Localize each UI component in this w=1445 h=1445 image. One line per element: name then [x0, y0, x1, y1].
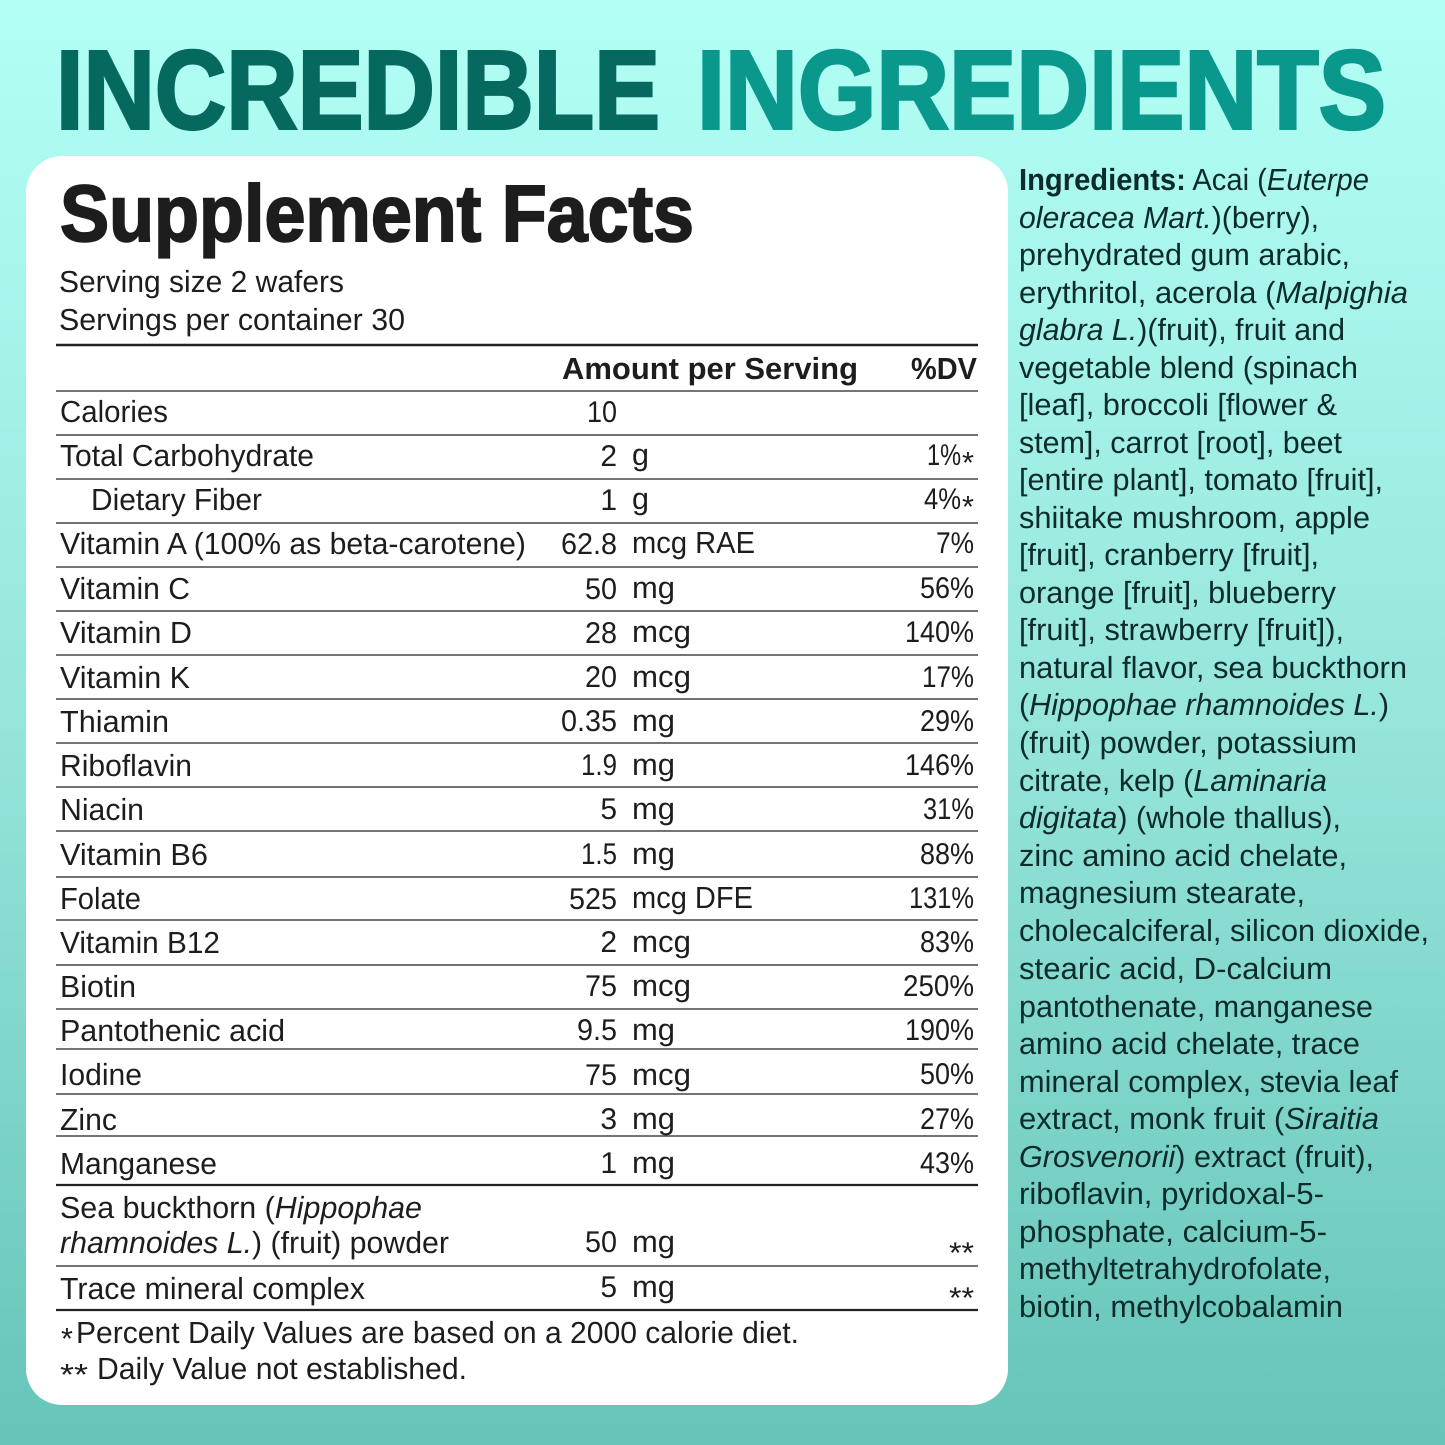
row: Biotin: 250%	[903, 970, 974, 1003]
row: Iodine	[60, 1058, 974, 1092]
ingredients text block: Ingredients: Acai (Euterpe	[1019, 163, 1369, 197]
row: Sea buckthorn powder: **	[949, 1237, 974, 1270]
row: Riboflavin: 1.9	[581, 749, 617, 782]
footnotes: Daily Value not established.	[97, 1352, 467, 1386]
row: Sea buckthorn powder: rhamnoides L.) (fruit) powder	[60, 1226, 449, 1260]
serving information	[59, 265, 405, 337]
row: Dietary Fiber: *	[962, 490, 974, 524]
row: Riboflavin	[60, 748, 974, 783]
row: Zinc: 3	[600, 1103, 617, 1136]
ingredients text block: digitata) (whole thallus),	[1019, 801, 1341, 835]
row: Trace mineral complex: **	[949, 1282, 974, 1315]
ingredients text block: riboflavin, pyridoxal-5-	[1019, 1177, 1324, 1211]
row: Niacin: Niacin	[60, 793, 144, 827]
row: Iodine: mcg	[632, 1058, 691, 1092]
ingredients text block: stem], carrot [root], beet	[1019, 426, 1343, 460]
row: Riboflavin: mg	[632, 748, 675, 782]
row: Biotin: 75	[585, 970, 617, 1003]
ingredients text block: vegetable blend (spinach	[1019, 351, 1358, 385]
row: Sea buckthorn powder	[60, 1191, 974, 1270]
ingredients text block: citrate, kelp (Laminaria	[1019, 764, 1327, 798]
row: Vitamin D: Vitamin D	[60, 616, 192, 650]
row: Manganese: Manganese	[60, 1147, 217, 1181]
row: Niacin	[60, 792, 974, 827]
row: Pantothenic acid: Pantothenic acid	[60, 1014, 285, 1048]
footnotes: Percent Daily Values are based on a 2000 calorie diet.	[76, 1316, 799, 1350]
row: Vitamin B12: mcg	[632, 925, 691, 959]
row: Vitamin B12: Vitamin B12	[60, 926, 220, 960]
ingredients text block: amino acid chelate, trace	[1019, 1027, 1360, 1061]
row: Vitamin B6: mg	[632, 837, 675, 871]
row: Folate: 131%	[909, 882, 974, 915]
row: Riboflavin: 146%	[905, 749, 974, 782]
ingredients text block: [leaf], broccoli [flower &	[1019, 388, 1337, 422]
row: Total Carbohydrate	[60, 438, 974, 480]
ingredients text block: orange [fruit], blueberry	[1019, 576, 1337, 610]
row: Folate: mcg DFE	[632, 881, 753, 915]
row: Vitamin B12: 2	[600, 926, 617, 959]
row: Vitamin D: 140%	[905, 616, 974, 649]
ingredients text block: oleracea Mart.)(berry),	[1019, 201, 1319, 235]
row: Vitamin K: Vitamin K	[60, 661, 190, 695]
row: Vitamin C: 50	[585, 573, 617, 606]
row: Trace mineral complex: mg	[632, 1270, 675, 1304]
ingredients text block: natural flavor, sea buckthorn	[1019, 651, 1407, 685]
row: Calories	[60, 395, 617, 429]
row: Dietary Fiber	[91, 482, 974, 524]
ingredients text block: extract, monk fruit (Siraitia	[1019, 1102, 1379, 1136]
heading: Supplement Facts: Supplement Facts	[60, 169, 694, 258]
row: Vitamin B6: 88%	[920, 838, 974, 871]
row: Calories: Calories	[60, 395, 168, 429]
row: Dietary Fiber: 1	[600, 484, 617, 517]
row: Pantothenic acid: mg	[632, 1013, 675, 1047]
row: Manganese	[60, 1146, 974, 1181]
row: Vitamin D	[60, 615, 974, 650]
row: Vitamin C: mg	[632, 571, 675, 605]
ingredients text block: [fruit], strawberry [fruit]),	[1019, 613, 1344, 647]
row: Pantothenic acid	[60, 1013, 974, 1048]
row: Vitamin C	[60, 571, 974, 606]
row: Biotin	[60, 969, 974, 1004]
row: Dietary Fiber: Dietary Fiber	[91, 483, 262, 517]
panel: supplement facts	[26, 156, 1008, 1405]
row: Iodine: 50%	[920, 1058, 974, 1091]
ingredients text block: biotin, methylcobalamin	[1019, 1290, 1343, 1324]
ingredients text block: glabra L.)(fruit), fruit and	[1019, 313, 1345, 347]
row: Vitamin K: 17%	[922, 661, 974, 694]
row: Vitamin B6: Vitamin B6	[60, 838, 208, 872]
row: Vitamin D: mcg	[632, 615, 691, 649]
row: Trace mineral complex	[60, 1270, 974, 1315]
row: Manganese: 1	[600, 1147, 617, 1180]
ingredients text block	[1019, 163, 1429, 1324]
row: Biotin: Biotin	[60, 970, 136, 1004]
ingredients text block: mineral complex, stevia leaf	[1019, 1065, 1399, 1099]
row: Vitamin K	[60, 660, 974, 695]
title: INGREDIENTS	[697, 28, 1386, 152]
row: Sea buckthorn powder: 50	[585, 1226, 617, 1259]
row: Dietary Fiber: g	[632, 482, 649, 516]
row: Iodine: 75	[585, 1059, 617, 1092]
row: Vitamin B6	[60, 837, 974, 872]
ingredients text block: [fruit], cranberry [fruit],	[1019, 538, 1319, 572]
row: Trace mineral complex: Trace mineral complex	[60, 1272, 365, 1306]
row: Zinc: Zinc	[60, 1103, 117, 1137]
row: Trace mineral complex: 5	[600, 1271, 617, 1304]
row: Biotin: mcg	[632, 969, 691, 1003]
serving information: Serving size 2 wafers	[59, 265, 344, 299]
row: Zinc: mg	[632, 1102, 675, 1136]
row: Zinc: 27%	[920, 1103, 974, 1136]
row: Total Carbohydrate: Total Carbohydrate	[60, 439, 314, 473]
row: Folate	[60, 881, 974, 916]
ingredients text block: zinc amino acid chelate,	[1019, 839, 1347, 873]
ingredients text block: stearic acid, D-calcium	[1019, 952, 1332, 986]
ingredients text block: erythritol, acerola (Malpighia	[1019, 276, 1408, 310]
row: Thiamin: Thiamin	[60, 705, 169, 739]
row: Manganese: 43%	[920, 1147, 974, 1180]
row: Iodine: Iodine	[60, 1058, 142, 1092]
row: Vitamin B12: 83%	[920, 926, 974, 959]
row: Niacin: mg	[632, 792, 675, 826]
row: Calories: 10	[587, 396, 617, 429]
row: Vitamin C: Vitamin C	[60, 572, 190, 606]
row: Thiamin: 29%	[920, 705, 974, 738]
row: Vitamin A: 7%	[936, 527, 974, 560]
ingredients text block: shiitake mushroom, apple	[1019, 501, 1370, 535]
row: Niacin: 31%	[923, 793, 974, 826]
ingredients text block: cholecalciferal, silicon dioxide,	[1019, 914, 1429, 948]
row: Vitamin D: 28	[585, 617, 617, 650]
row: Riboflavin: Riboflavin	[60, 749, 192, 783]
row: Vitamin C: 56%	[920, 572, 974, 605]
title: INCREDIBLE	[56, 28, 660, 152]
row: Niacin: 5	[600, 793, 617, 826]
row: Pantothenic acid: 190%	[905, 1014, 974, 1047]
ingredients text block: phosphate, calcium-5-	[1019, 1215, 1327, 1249]
row: Vitamin K: 20	[585, 661, 617, 694]
table column headers: %DV	[911, 352, 978, 386]
ingredients text block: (fruit) powder, potassium	[1019, 726, 1357, 760]
row: Manganese: mg	[632, 1146, 675, 1180]
serving information: Servings per container 30	[59, 303, 405, 337]
row: Pantothenic acid: 9.5	[577, 1014, 617, 1047]
row: Total Carbohydrate: 2	[600, 440, 617, 473]
row: Total Carbohydrate: g	[632, 438, 649, 472]
row: Zinc	[60, 1102, 974, 1137]
row: Sea buckthorn powder: mg	[632, 1225, 675, 1259]
row: Folate: 525	[569, 883, 617, 916]
ingredients text block: methyltetrahydrofolate,	[1019, 1252, 1331, 1286]
row: Vitamin A: Vitamin A (100% as beta-carotene)	[60, 527, 526, 561]
row: Total Carbohydrate: 1%	[927, 439, 961, 472]
footnotes: **	[60, 1358, 88, 1392]
row: Vitamin A	[60, 526, 974, 561]
row: Total Carbohydrate: *	[962, 446, 974, 480]
ingredients text block: [entire plant], tomato [fruit],	[1019, 463, 1383, 497]
ingredients text block: Grosvenorii) extract (fruit),	[1019, 1140, 1374, 1174]
row: Vitamin B12	[60, 925, 974, 960]
row: Thiamin	[60, 704, 974, 739]
ingredients text block: pantothenate, manganese	[1019, 990, 1373, 1024]
row: Vitamin A: mcg RAE	[632, 526, 755, 560]
footnotes: *	[61, 1322, 73, 1356]
footnotes	[60, 1316, 799, 1392]
table column headers: Amount per Serving	[562, 352, 858, 386]
ingredients text block: (Hippophae rhamnoides L.)	[1019, 688, 1389, 722]
row: Vitamin K: mcg	[632, 660, 691, 694]
row: Folate: Folate	[60, 882, 141, 916]
title	[56, 28, 1386, 152]
row: Thiamin: 0.35	[561, 705, 617, 738]
row: Thiamin: mg	[632, 704, 675, 738]
row: Dietary Fiber: 4%	[924, 483, 961, 516]
row: Vitamin B6: 1.5	[581, 838, 617, 871]
ingredients text block: prehydrated gum arabic,	[1019, 238, 1350, 272]
row: Sea buckthorn powder: Sea buckthorn (Hippophae	[60, 1191, 422, 1225]
row: Vitamin A: 62.8	[561, 528, 617, 561]
ingredients text block: magnesium stearate,	[1019, 876, 1305, 910]
